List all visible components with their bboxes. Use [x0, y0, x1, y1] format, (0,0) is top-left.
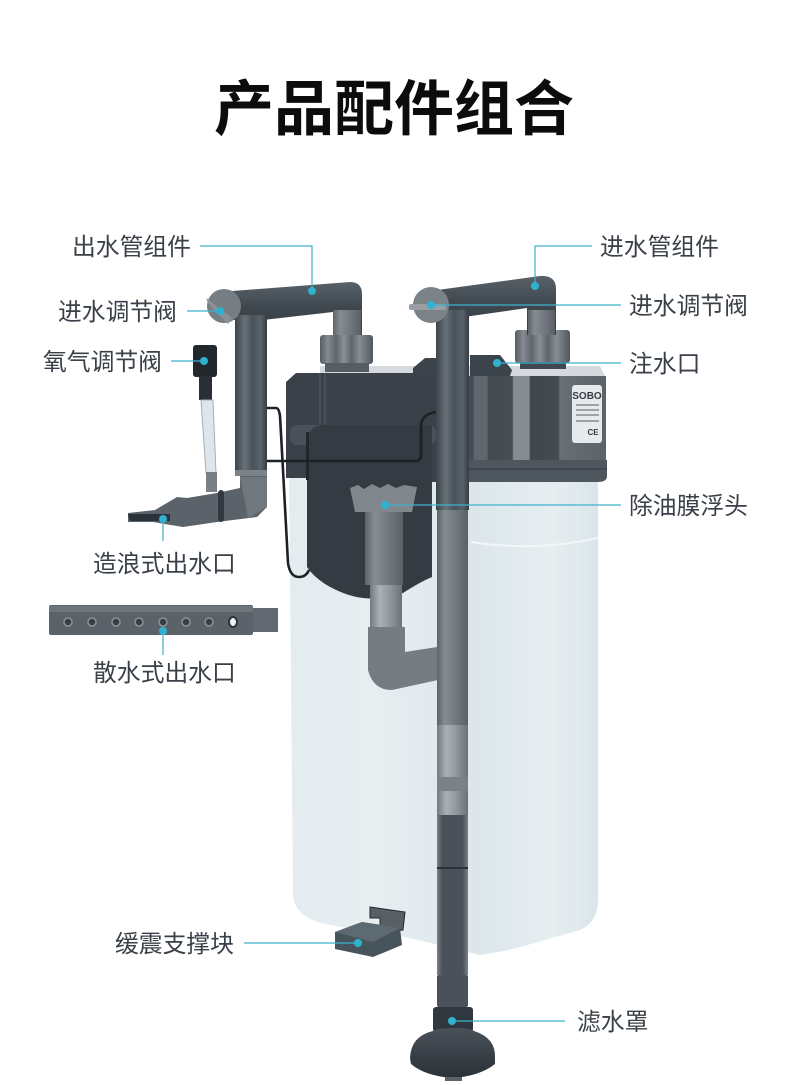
callout: oxygen valve: 氧气调节阀: [43, 349, 162, 376]
brand label: [572, 385, 602, 443]
outlet nut, left: [320, 335, 373, 372]
callout: cushion block: 缓震支撑块: [115, 931, 234, 958]
callout: inlet valve: 进水调节阀: [629, 293, 748, 320]
canister top highlight strip: [320, 366, 606, 378]
spray bar outlet: [49, 605, 278, 635]
canister white body: [289, 470, 598, 955]
callout: water fill port: 注水口: [629, 351, 700, 378]
wave outlet elbow and nozzle: [128, 476, 267, 527]
canister dark rear panel: [286, 373, 440, 482]
callout: skimmer float: 除油膜浮头: [629, 493, 748, 520]
callout: spray outlet: [93, 627, 236, 687]
skimmer float and elbow: [350, 484, 462, 690]
filter strainer foot: [410, 1007, 495, 1081]
title: 产品配件组合: [214, 76, 574, 143]
callout: cushion block: [115, 931, 362, 958]
callout: skimmer float: [381, 493, 748, 520]
outlet valve knob: [207, 289, 241, 323]
callout: outlet pipe: 出水管组件: [72, 234, 191, 261]
callout: inlet pipe: [531, 234, 719, 290]
fill port cap: [413, 355, 512, 376]
inlet pipe assembly: [409, 276, 556, 1007]
outlet pipe assembly: [206, 282, 362, 476]
canister top head: [466, 376, 606, 462]
callout: outlet pipe: [72, 234, 316, 295]
callout: water fill port: [493, 351, 700, 378]
callout: strainer: [448, 1009, 648, 1036]
cushion support block: [335, 907, 405, 957]
callout: outlet valve: 进水调节阀: [58, 299, 177, 326]
callout: inlet valve: [427, 293, 748, 320]
callout: spray outlet: 散水式出水口: [93, 660, 236, 687]
oxygen valve: [193, 345, 217, 492]
callout: wave outlet: [93, 515, 236, 578]
rear clip panel: [307, 425, 432, 598]
filter canister product: [286, 330, 607, 955]
brand label: SOBO: [572, 391, 602, 402]
callout: wave outlet: 造浪式出水口: [93, 551, 236, 578]
hanging wire hook: [266, 408, 436, 577]
callout: inlet pipe: 进水管组件: [600, 234, 719, 261]
callout: strainer: 滤水罩: [577, 1009, 648, 1036]
brand label: CE: [587, 428, 599, 437]
inlet valve knob: [413, 287, 449, 323]
inlet nut, right: [515, 330, 570, 369]
